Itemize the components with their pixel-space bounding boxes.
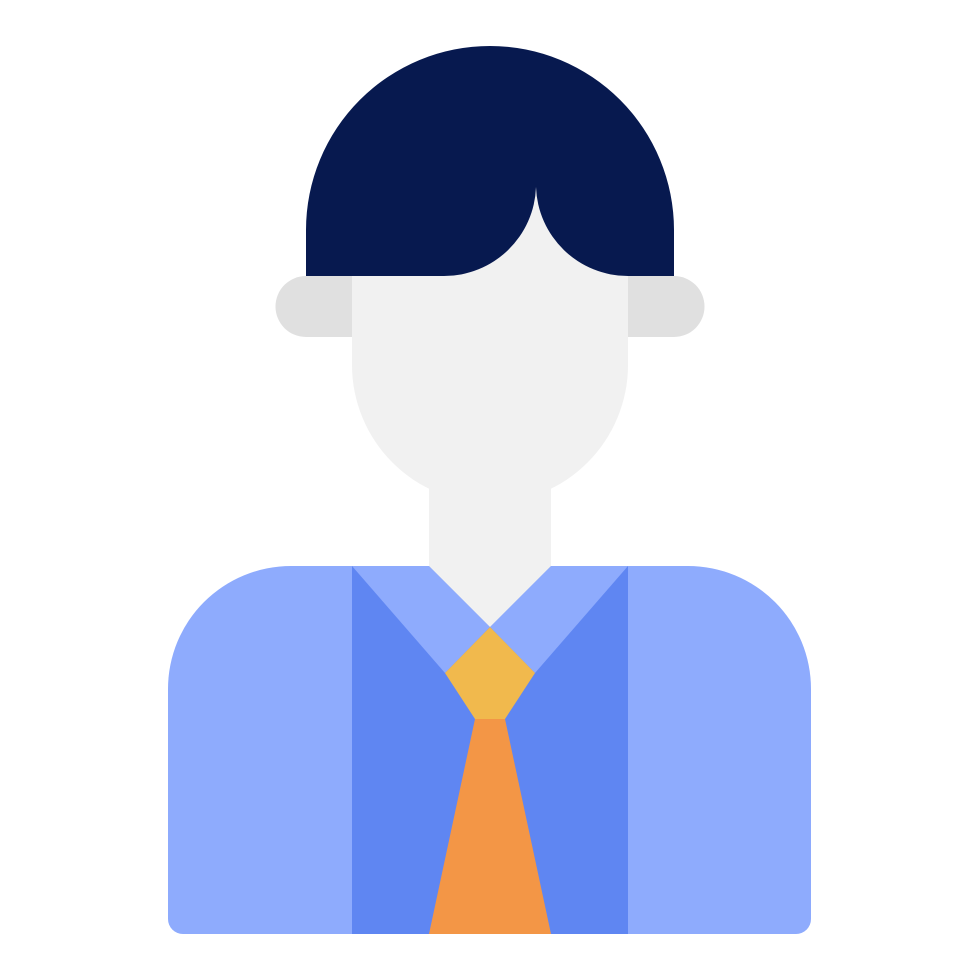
neck	[429, 470, 551, 627]
shirt panel	[352, 566, 628, 934]
tie	[429, 719, 551, 934]
face	[352, 180, 628, 503]
tie knot	[445, 627, 535, 719]
jacket	[168, 566, 811, 934]
collar	[352, 566, 628, 673]
hair	[306, 46, 674, 276]
ears	[275, 276, 704, 337]
